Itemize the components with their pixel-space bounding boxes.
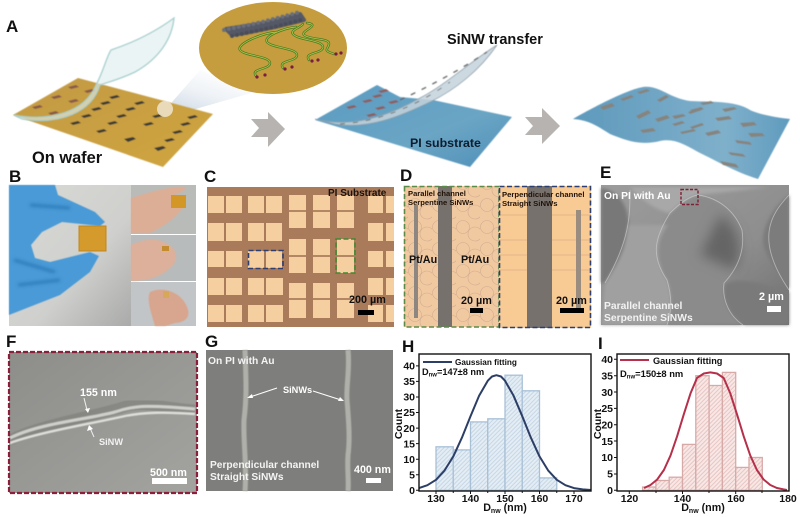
nanowire highlights <box>240 23 334 76</box>
panel I: diameter histogram, red <box>592 334 797 515</box>
dark lobes <box>601 187 789 325</box>
y tick labels: 5 <box>607 468 613 480</box>
panel E: serpentine SEM image <box>600 163 789 325</box>
x tick labels: 120 <box>621 493 638 505</box>
perpendicular channel image: Straight SiNWs <box>502 199 558 208</box>
flexible chip <box>79 226 106 251</box>
nanowire <box>10 405 195 443</box>
label D: D <box>400 166 412 185</box>
panel F: nanowire close-up SEM: 155 nm <box>80 387 117 399</box>
panel G: straight nanowire SEM <box>205 332 393 491</box>
perpendicular channel image <box>499 186 591 328</box>
magnification cone <box>172 70 255 114</box>
tick marks <box>614 359 762 494</box>
panel H: diameter histogram, blue: D <box>422 367 429 377</box>
magnified lens view <box>199 2 347 94</box>
y tick labels: 20 <box>403 423 415 435</box>
Gaussian curve <box>644 372 787 490</box>
panel A: transfer process <box>6 2 790 179</box>
x tick labels <box>621 493 797 505</box>
main photo <box>9 185 131 326</box>
panel I: diameter histogram, red: D <box>681 502 689 514</box>
label C: C <box>204 167 216 186</box>
panel B: flexible device photos <box>9 167 196 326</box>
y tick labels: 40 <box>403 360 415 372</box>
nanowires <box>244 350 349 491</box>
panel I: diameter histogram, red: =150±8 nm <box>635 368 683 379</box>
y tick labels <box>403 360 415 497</box>
x tick labels: 140 <box>462 493 479 505</box>
panel H: diameter histogram, blue: D <box>483 502 491 514</box>
parallel channel image: Parallel channel <box>408 189 466 198</box>
panel F: nanowire close-up SEM: 500 nm <box>150 467 187 479</box>
label A: A <box>6 17 18 36</box>
y tick labels <box>601 354 613 497</box>
y tick labels: 0 <box>409 485 415 497</box>
y tick labels: 30 <box>601 387 613 399</box>
panel E: serpentine SEM image: Serpentine SiNWs <box>604 313 693 324</box>
tick marks <box>416 366 574 494</box>
y tick labels: 10 <box>403 454 415 466</box>
scale bar <box>349 294 386 315</box>
dark red inset marker <box>681 190 698 204</box>
panel I: diameter histogram, red: (nm) <box>699 502 725 514</box>
panel D: optical channel images <box>400 166 591 328</box>
y tick labels: 25 <box>601 403 613 415</box>
x tick labels: 150 <box>496 493 514 505</box>
y tick labels: 25 <box>403 407 415 419</box>
x tick labels <box>427 493 583 505</box>
icon: gloved hand <box>9 185 105 315</box>
Gaussian curve <box>419 375 591 490</box>
y tick labels: 30 <box>403 392 415 404</box>
arrow 1 <box>251 112 285 147</box>
panel G: straight nanowire SEM: SiNWs <box>283 385 312 395</box>
panel I: diameter histogram, red: nw <box>689 508 699 515</box>
electrode pads <box>208 195 394 322</box>
caption: SiNW transfer: SiNW transfer <box>447 32 543 48</box>
panel H: diameter histogram, blue: nw <box>429 372 437 378</box>
x tick labels: 160 <box>727 493 745 505</box>
small magnified spot <box>157 101 173 117</box>
axis titles: Count <box>592 408 604 439</box>
x tick labels: 130 <box>427 493 445 505</box>
nanowire contacts <box>255 51 343 79</box>
parallel channel image: Serpentine SiNWs <box>408 198 473 207</box>
wafer with chips <box>13 78 213 167</box>
bend photo 2 <box>131 235 196 281</box>
bars <box>643 372 762 490</box>
legend <box>423 361 452 363</box>
panel G: straight nanowire SEM: Perpendicular channel <box>210 460 319 471</box>
panel I: diameter histogram, red: D <box>620 368 627 379</box>
panel H: diameter histogram, blue: =147±8 nm <box>437 367 484 377</box>
panel H: diameter histogram, blue: nw <box>491 508 501 515</box>
porous silicon block <box>224 12 305 36</box>
bars <box>436 375 557 490</box>
x tick labels: 180 <box>779 493 797 505</box>
label H: H <box>402 337 414 356</box>
panel I: diameter histogram, red: Gaussian fitting <box>653 356 722 366</box>
panel H: diameter histogram, blue <box>393 337 591 515</box>
caption: on wafer: On wafer <box>32 149 103 167</box>
parallel channel image <box>404 186 499 327</box>
axis titles: Count <box>393 408 405 439</box>
serpentine edges <box>605 190 789 325</box>
panel H: diameter histogram, blue: (nm) <box>501 502 527 514</box>
y tick labels: 20 <box>601 420 613 432</box>
panel G: straight nanowire SEM: Straight SiNWs <box>210 472 284 483</box>
panel C: device array micrograph <box>204 167 394 327</box>
y tick labels: 15 <box>601 436 613 448</box>
bend photo 1 <box>131 185 196 234</box>
label E: E <box>600 163 611 182</box>
caption: PI substrate: PI substrate <box>410 136 481 150</box>
bend photo 3 <box>131 282 196 326</box>
serpentine nanowires <box>240 23 334 76</box>
panel G: straight nanowire SEM: 400 nm <box>354 464 391 476</box>
parallel channel image: Pt/Au <box>409 254 437 266</box>
blue region marker <box>248 250 283 268</box>
green region marker <box>336 239 355 273</box>
label B: B <box>9 167 21 186</box>
perpendicular channel image: 20 µm <box>556 295 587 307</box>
axes frame <box>419 354 591 491</box>
scale bar: 200 µm <box>349 294 386 306</box>
panel E: serpentine SEM image: Parallel channel <box>604 301 683 312</box>
perpendicular channel image: Perpendicular channel <box>502 190 584 199</box>
y tick labels: 10 <box>601 452 613 464</box>
peeling glass sheet <box>14 18 174 120</box>
label G: G <box>205 332 218 351</box>
panel I: diameter histogram, red: nw <box>627 374 635 380</box>
y tick labels: 40 <box>601 354 613 366</box>
label I: I <box>598 334 603 353</box>
x tick labels: 160 <box>531 493 548 505</box>
parallel channel image: 20 µm <box>461 295 492 307</box>
y tick labels: 35 <box>403 376 415 388</box>
PI substrate with peeling sheet <box>315 45 512 167</box>
panel G: straight nanowire SEM: On PI with Au <box>208 356 275 367</box>
panel F: nanowire close-up SEM <box>6 332 197 493</box>
x tick labels: 170 <box>565 493 583 505</box>
channel gaps <box>289 210 354 300</box>
axes frame <box>617 354 789 491</box>
panel E: serpentine SEM image: 2 µm <box>759 291 784 303</box>
panel E: serpentine SEM image: On PI with Au <box>604 191 671 202</box>
parallel channel image: Pt/Au <box>461 254 489 266</box>
y tick labels: 0 <box>607 485 613 497</box>
substrate caption: PI Substrate <box>328 188 387 199</box>
x tick labels: 140 <box>674 493 691 505</box>
arrow 2 <box>525 108 560 144</box>
label F: F <box>6 332 16 351</box>
legend <box>620 359 649 361</box>
panel F: nanowire close-up SEM: SiNW <box>99 437 123 447</box>
y tick labels: 15 <box>403 438 415 450</box>
panel H: diameter histogram, blue: Gaussian fitting <box>455 358 517 367</box>
wavy flexible device <box>573 87 790 179</box>
y tick labels: 35 <box>601 370 613 382</box>
y tick labels: 5 <box>409 470 415 482</box>
